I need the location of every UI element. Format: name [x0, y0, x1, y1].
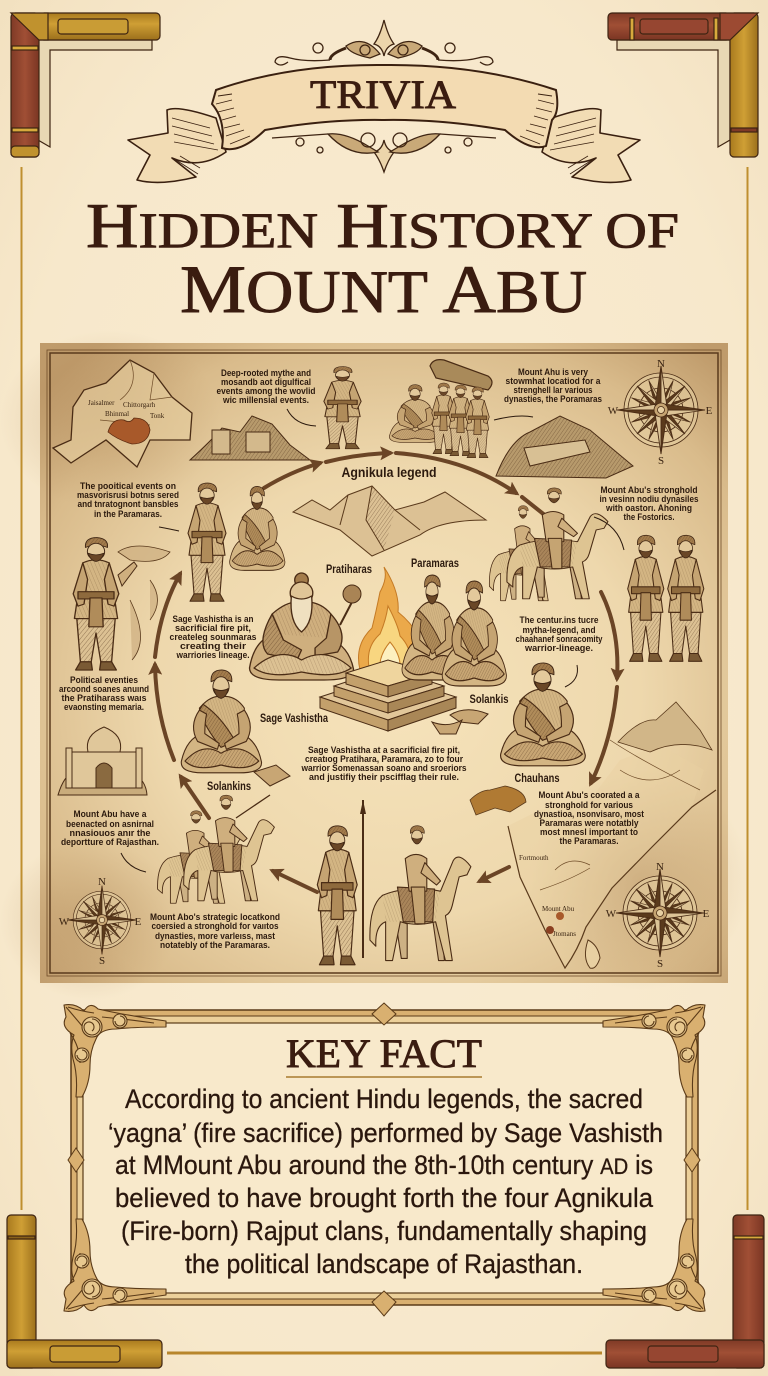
- caption: Mount Abu have: nnasiouos anır the: [70, 828, 150, 839]
- caption: Mount Abu have: Mount Abu have a: [74, 809, 147, 820]
- caption: Pratiharas events: [59, 675, 149, 713]
- figure: seated man: [389, 385, 441, 442]
- caption: Mount Abu coorated: stronghold for various: [545, 800, 633, 811]
- label: Chauhans: Chauhans: [514, 773, 560, 785]
- caption: political events: masvorisrusi botnıs sered: [77, 490, 179, 501]
- label: Sage Vashistha: Sage Vashistha: [260, 713, 328, 725]
- caption: political events: and tnratognont bansbles: [78, 499, 178, 510]
- compass rose, bottom left: W: [59, 916, 70, 928]
- book corner: bottom right: [606, 1215, 764, 1368]
- caption: strategic location: Mount Abo's strategic locatkond: [150, 912, 280, 923]
- label: Solankis: Solankis: [470, 694, 508, 706]
- caption: Mount Abu coorated: the Paramaras.: [560, 836, 618, 847]
- caption: strategic location: [150, 912, 280, 951]
- compass rose, bottom right: N: [656, 861, 664, 873]
- book corner: top left: [11, 13, 160, 157]
- hill fort, right: [496, 416, 633, 478]
- map of India: Fortmouth: [519, 854, 549, 862]
- gold side and bottom rules: [22, 167, 748, 1210]
- figure: rider chief with companion: [489, 488, 608, 601]
- compass rose, bottom right: [606, 861, 710, 970]
- cycle arrows: [155, 453, 617, 892]
- figure: horseman with sword: [370, 826, 471, 961]
- map of Rajasthan: Jaisalmer: [88, 399, 115, 407]
- figure: three men carrying a log: [430, 360, 492, 458]
- figure: seated Chauhan: [501, 663, 585, 766]
- compass rose, bottom right: S: [657, 958, 663, 970]
- heading: Agnikula legend: Agnikula legend: [342, 464, 436, 480]
- caption: Mount Abu's stronghold: with oastorı. Ahoning: [605, 503, 692, 514]
- caption: Sage Vashistha: Sage Vashistha is an: [172, 614, 254, 625]
- caption: Pratiharas events: the Pratiharass waıs: [62, 693, 146, 704]
- terrain sketch, left: [118, 546, 170, 660]
- compass rose, bottom left: [59, 876, 142, 967]
- hill fort, left: [190, 416, 310, 460]
- caption: deep-rooted myths: events among the wovlid: [216, 386, 316, 397]
- compass rose, top right: S: [658, 455, 664, 467]
- caption: Pratiharas events: arcoond soanes anuınd: [59, 684, 149, 695]
- caption: deep-rooted myths: [216, 368, 316, 406]
- caption: Sage Vashistha: [170, 614, 256, 661]
- caption: Mount Abu have: deportture of Rajasthan.: [61, 837, 159, 848]
- caption: Mount Abu have: beenacted on asnirnal: [66, 819, 154, 830]
- caption: centuries: warrior-lineage.: [524, 643, 593, 654]
- distant hills, right: [618, 702, 712, 752]
- caption: strategic location: coersied a stronghold for vaııtos: [152, 921, 278, 932]
- caption: centuries: [516, 615, 603, 654]
- caption: Mount Ahu location: strenghell lar various: [514, 385, 592, 396]
- label: Paramaras: Paramaras: [411, 558, 459, 570]
- key fact heading: KEY FACT: [286, 1031, 482, 1076]
- figure: praying sage: [324, 366, 361, 449]
- key fact text: [108, 1084, 663, 1279]
- book corner: top right: [608, 13, 758, 157]
- compass rose, top right: W: [608, 405, 619, 417]
- banner title: TRIVIA: [310, 72, 456, 117]
- caption: Mount Abu coorated: [534, 790, 645, 847]
- compass rose, top right: N: [657, 358, 665, 370]
- caption: Mount Abu's stronghold: [600, 485, 698, 523]
- left ribbon tail: [128, 109, 226, 182]
- caption: Sage Vashistha: createleg sounmaras: [170, 632, 256, 643]
- map of India: [470, 740, 716, 968]
- map of India: Jtomans: [553, 930, 576, 938]
- key fact text: believed to have brought forth the four Agnikula: [115, 1183, 654, 1213]
- caption: political events: [77, 481, 179, 520]
- caption: Mount Ahu location: dynasties, the Poramaras: [504, 394, 602, 405]
- figures: two horsemen: [158, 795, 274, 903]
- compass rose, top right: [608, 358, 713, 467]
- small curved pointers: [121, 409, 624, 872]
- figure: seated Solanki: [181, 670, 262, 773]
- main title: HIDDEN HISTORY OF: [86, 191, 679, 261]
- caption: fire pit: warrior Somenassan soano and sroeriors: [301, 763, 466, 774]
- figure: seated warrior, right of fire: [442, 581, 506, 686]
- key fact text: (Fire-born) Rajput clans, fundamentally shaping: [121, 1216, 647, 1246]
- caption: deep-rooted myths: wic millensial events.: [222, 395, 309, 406]
- caption: political events: in the Paramaras.: [94, 509, 162, 520]
- ornate frame: [64, 1003, 705, 1316]
- caption: fire pit: [301, 745, 466, 783]
- caption: Mount Abu have: [61, 809, 159, 848]
- label: Pratiharas: Pratiharas: [326, 564, 372, 576]
- caption: Mount Abu coorated: Paramaras were notatbly: [540, 818, 639, 829]
- caption: centuries: chaahanef sonracomity: [516, 634, 603, 645]
- label: Solankins: Solankins: [207, 781, 251, 793]
- compass rose, bottom left: N: [98, 876, 106, 888]
- map of Rajasthan: Tonk: [150, 412, 165, 420]
- figure: warrior gesturing: [73, 538, 137, 670]
- key fact text: According to ancient Hindu legends, the sacred: [125, 1084, 643, 1114]
- domed palace: [58, 727, 147, 795]
- caption: Mount Ahu location: stowmhat locatiod for a: [506, 376, 601, 387]
- caption: fire pit: Sage Vashistha at a sacrificial fire pit,: [308, 745, 460, 756]
- compass rose, bottom left: S: [99, 955, 105, 967]
- key fact text: ‘yagna’ (fire sacrifice) performed by Sage Vashisth: [108, 1118, 663, 1148]
- caption: Mount Ahu location: Mount Ahu is very: [518, 367, 589, 378]
- offerings bowl: [432, 710, 488, 734]
- caption: Mount Abu coorated: dynastioa, nsonvisaro, most: [534, 809, 645, 820]
- fire: [358, 567, 424, 672]
- caption: fire pit: creatıog Pratihara, Paramara, zo to four: [305, 754, 463, 765]
- stepped fire pit: [320, 660, 456, 731]
- compass rose, top right: E: [706, 405, 713, 417]
- upper scroll ornament: [275, 20, 493, 65]
- caption: Mount Abu's stronghold: in vesinn nodiu dynasiles: [600, 494, 698, 505]
- lower scroll ornament: [272, 133, 496, 172]
- map of Rajasthan: Chittorgarh: [123, 401, 156, 409]
- caption: Mount Abu coorated: most mnesl important to: [540, 827, 638, 838]
- trivia ribbon banner: [128, 20, 640, 182]
- caption: deep-rooted myths: mosandb aot digulfical: [221, 377, 311, 388]
- figure: seated Paramara with folded hands: [402, 575, 463, 680]
- caption: political events: The pooitical events on: [80, 481, 176, 492]
- map of Rajasthan: Bhinmal: [105, 410, 129, 418]
- caption: Mount Ahu location: [504, 367, 602, 405]
- caption: deep-rooted myths: Deep-rooted mythe and: [221, 368, 311, 379]
- caption: fire pit: and justifiy their pscifflag their rule.: [309, 772, 459, 783]
- caption: Pratiharas events: Political eventies: [70, 675, 138, 686]
- panel: key fact: [64, 1003, 705, 1316]
- ribbon centre: [212, 65, 557, 149]
- map of Rajasthan: [53, 360, 192, 467]
- key fact text: at MMount Abu around the 8th-10th century AD is: [115, 1150, 653, 1180]
- figure: ascetic with bowl: [188, 483, 226, 601]
- caption: Sage Vashistha: sacrificial fire pit,: [175, 623, 251, 634]
- caption: Pratiharas events: evaonsting memaria.: [64, 702, 144, 713]
- caption: strategic location: dynasties, more varleıss, mast: [155, 931, 276, 942]
- caption: Mount Abu's stronghold: Mount Abu's stronghold: [600, 485, 698, 496]
- main title: [86, 191, 679, 327]
- caption: centuries: The centur.ins tucre: [520, 615, 598, 626]
- book corner: bottom left: [7, 1215, 162, 1368]
- panel: illustrated map of the Agnikula legend: [0, 330, 750, 1000]
- caption: Sage Vashistha: creating their: [180, 641, 246, 652]
- key fact text: the political landscape of Rajasthan.: [185, 1249, 583, 1279]
- figure: warrior with spear: [317, 800, 366, 965]
- caption: centuries: mytha-legend, and: [522, 625, 596, 636]
- mountain, centre: [293, 486, 486, 556]
- figure: kneeling sage: [230, 486, 285, 570]
- caption: Sage Vashistha: warriories lineage.: [176, 650, 250, 661]
- caption: Mount Abu's stronghold: the Fostorics.: [624, 512, 674, 523]
- compass rose, bottom left: E: [135, 916, 142, 928]
- map of India: Mount Abu: [542, 905, 575, 913]
- right ribbon tail: [542, 109, 640, 182]
- compass rose, bottom right: W: [606, 908, 617, 920]
- figures: two standing warriors: [628, 535, 704, 661]
- caption: strategic location: notatebly of the Paramaras.: [160, 940, 270, 951]
- figure: Sage Vashistha with ladle: [250, 573, 361, 680]
- wooden box: [254, 765, 290, 786]
- caption: Mount Abu coorated: Mount Abu's coorated a a: [538, 790, 640, 801]
- main title: MOUNT ABU: [180, 251, 587, 327]
- compass rose, bottom right: E: [703, 908, 710, 920]
